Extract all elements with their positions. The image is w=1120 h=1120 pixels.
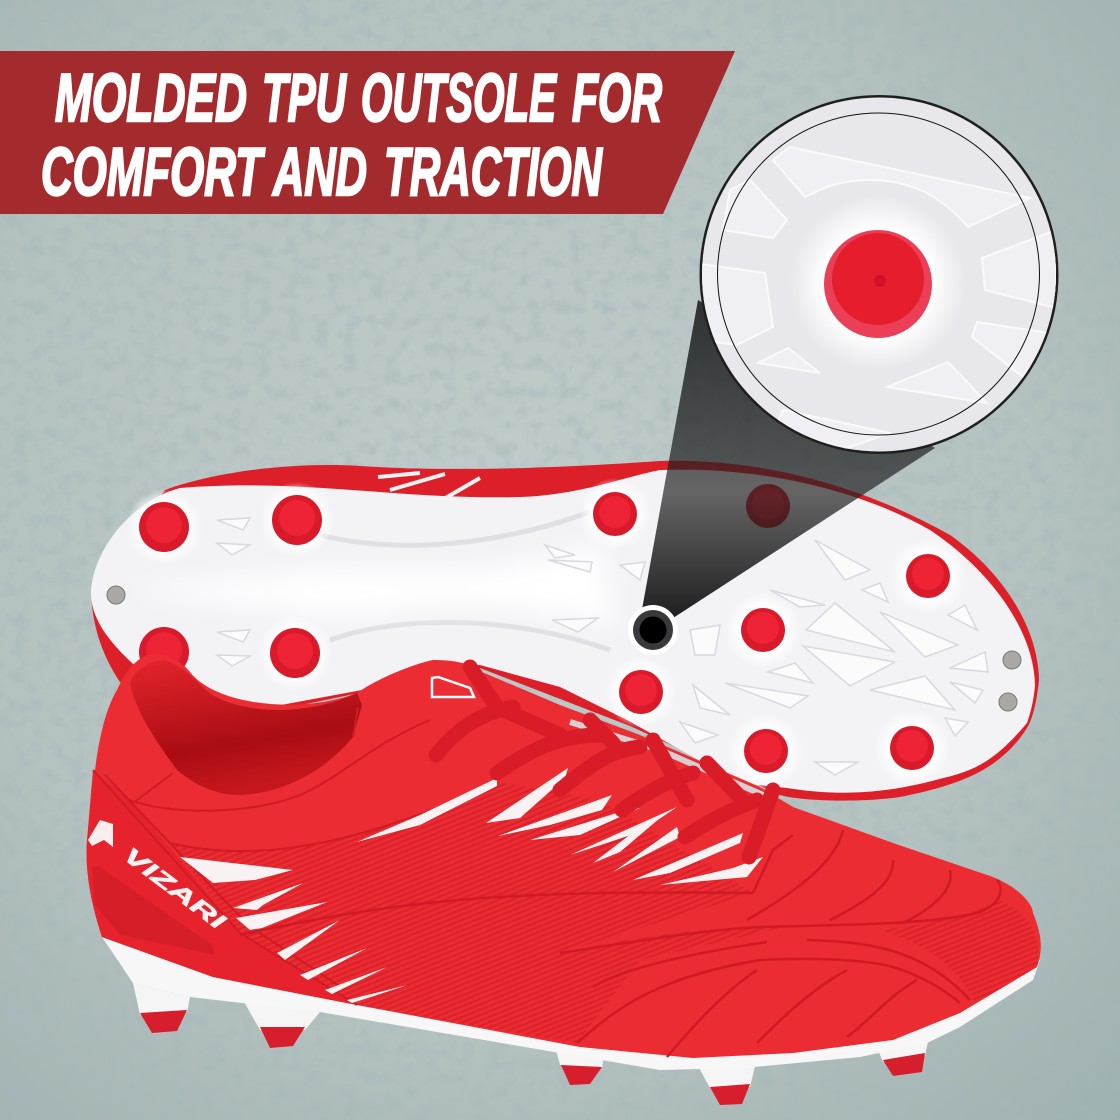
inner heel lining — [130, 660, 362, 795]
ribbed lower band — [470, 927, 780, 1043]
red studs — [139, 484, 950, 773]
title text — [41, 60, 662, 210]
sole centre highlight — [130, 545, 615, 625]
collar and panel seams — [93, 707, 497, 1005]
boot sole (rear boot, bottom view) — [91, 461, 1039, 801]
upper visible behind sole — [91, 461, 1039, 801]
title text: TPU — [262, 60, 347, 136]
upper stripes on rear boot — [378, 473, 480, 500]
ribbed toe panel — [880, 900, 1038, 1003]
magnifier lens — [700, 96, 1058, 454]
lens close-up of sole — [700, 96, 1058, 454]
white midsole — [102, 937, 1040, 1070]
heel side panel — [87, 770, 357, 1005]
metal heel and toe pins — [107, 586, 1021, 711]
title text: AND — [272, 134, 367, 210]
sole sculpting grooves — [320, 512, 610, 650]
magnifier beam — [641, 300, 935, 620]
pointer target dot — [628, 605, 678, 655]
boot upper — [87, 654, 1041, 1058]
heel and forefoot cleats — [133, 983, 928, 1105]
stud halos — [126, 478, 966, 789]
front boot (side view) — [87, 654, 1041, 1105]
laces — [436, 667, 773, 857]
title text: TRACTION — [384, 134, 603, 210]
tongue edge highlight — [570, 722, 770, 798]
heel ribbing — [92, 867, 215, 955]
title text: MOLDED — [55, 60, 247, 136]
tongue logo — [432, 677, 474, 697]
white upper stripes — [180, 768, 763, 1003]
white outsole — [91, 470, 1035, 793]
brand logo and name: VIZARI — [119, 842, 231, 935]
forefoot traction shapes — [217, 518, 988, 775]
title text: FOR — [572, 60, 662, 136]
red stud tops — [146, 488, 944, 765]
close-up stud — [824, 230, 932, 338]
title text: COMFORT — [41, 134, 266, 210]
brand logo and name — [88, 820, 231, 935]
title text: OUTSOLE — [361, 60, 558, 136]
title banner — [0, 51, 735, 214]
forefoot seam lines — [240, 830, 1001, 1057]
ribbed mid panel — [170, 782, 753, 1025]
